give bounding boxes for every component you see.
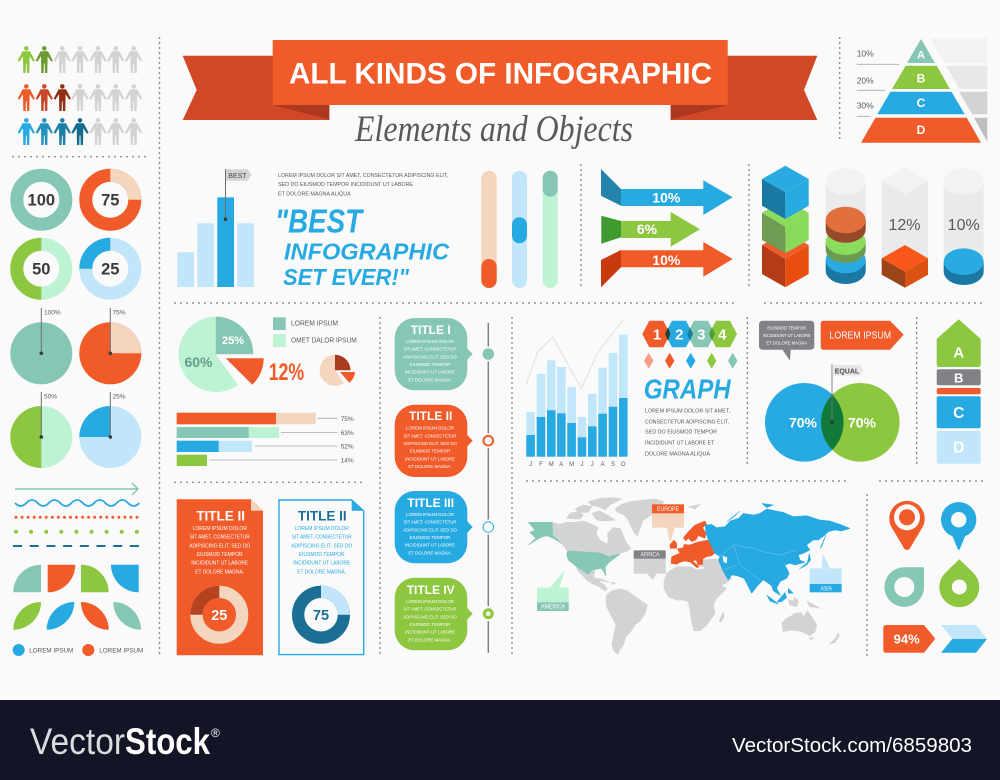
12 percent prism: 12% bbox=[888, 217, 921, 234]
timeline bubble IV bbox=[395, 578, 473, 650]
timeline bubble II: INCIDIDUNT UT LABORE bbox=[405, 456, 455, 461]
lorem paragraph: LOREM IPSUM DOLOR SIT AMET, CONSECTETUR ADIPISCING ELIT, bbox=[278, 173, 448, 179]
exploded pie chart: 60% bbox=[184, 354, 213, 370]
lorem paragraph bbox=[278, 173, 448, 198]
outlined document card: LOREM IPSUM DOLOR bbox=[295, 526, 349, 532]
timeline bubble I: SIT AMET, CONSECTETUR bbox=[404, 347, 457, 352]
bottom left legend bbox=[13, 644, 143, 656]
graph heading: GRAPH bbox=[644, 374, 731, 405]
94 percent tag: 94% bbox=[894, 632, 920, 646]
exploded pie chart bbox=[178, 317, 304, 392]
timeline bubble III: INCIDIDUNT UT LABORE bbox=[405, 543, 455, 548]
quarter circle and leaf shapes bbox=[13, 565, 141, 630]
outlined document card: INCIDIDUNT UT LABORE bbox=[293, 561, 351, 567]
africa callout: AFRICA bbox=[640, 553, 659, 559]
outlined document card: ADIPISCING ELIT, SED DO bbox=[291, 543, 352, 549]
diamonds bbox=[644, 353, 737, 369]
graph paragraph: CONSECTETUR ADIPISCING ELIT, bbox=[645, 419, 729, 425]
teal drop icon bbox=[884, 567, 924, 607]
timeline bubble I: LOREM IPSUM DOLOR bbox=[406, 339, 455, 344]
venn diagram: 70% bbox=[848, 415, 877, 431]
outlined document card: TITLE II bbox=[298, 509, 347, 524]
timeline bubble II bbox=[395, 405, 473, 477]
speech bubble bbox=[759, 321, 814, 361]
column chart with line: J bbox=[529, 462, 532, 468]
pie charts with labels: 75% bbox=[112, 310, 126, 316]
pie charts with labels: 100% bbox=[44, 310, 61, 316]
africa callout bbox=[634, 550, 666, 580]
venn diagram: 70% bbox=[789, 415, 818, 431]
column chart with line: A bbox=[601, 462, 605, 468]
timeline bbox=[395, 318, 496, 653]
timeline bubble II: ET DOLORE MAGNA. bbox=[408, 464, 452, 469]
orange document card: SIT AMET, CONSECTETUR bbox=[190, 535, 250, 541]
folded arrows: 10% bbox=[652, 190, 681, 206]
orange document card: ADIPISCING ELIT, SED DO bbox=[189, 543, 250, 549]
exploded pie chart: 25% bbox=[222, 335, 244, 347]
timeline bubble II: ADIPISCING ELIT, SED DO bbox=[403, 441, 457, 446]
timeline bubble II: LOREM IPSUM DOLOR bbox=[406, 426, 455, 431]
donut charts: 100 bbox=[28, 192, 55, 210]
graph paragraph: INCIDIDUNT UT LABORE ET bbox=[645, 440, 715, 446]
orange document card: TITLE II bbox=[196, 509, 245, 524]
speech bubble: ET DOLORE MAGNA bbox=[766, 340, 807, 346]
numbered hexagons: 4 bbox=[718, 326, 727, 344]
title text: ALL KINDS OF INFOGRAPHIC bbox=[289, 57, 712, 90]
lorem ipsum tag: LOREM IPSUM bbox=[829, 330, 891, 342]
subtitle: Elements and Objects bbox=[354, 109, 633, 150]
timeline bubble IV: ADIPISCING ELIT, SED DO bbox=[403, 614, 457, 619]
horizontal progress bars: 75% bbox=[341, 416, 354, 423]
speech bubble: INCIDIDUNT UT LABORE bbox=[763, 333, 811, 338]
america callout: AMERICA bbox=[541, 605, 565, 611]
timeline bubble I: TITLE I bbox=[411, 323, 451, 337]
timeline bubble I: INCIDIDUNT UT LABORE bbox=[405, 370, 455, 375]
pie charts with labels bbox=[10, 308, 141, 468]
10 percent cylinder: 10% bbox=[948, 217, 980, 234]
title ribbon bbox=[183, 40, 817, 120]
timeline bubble III bbox=[395, 491, 473, 563]
quote bbox=[275, 203, 449, 290]
donut charts: 75 bbox=[101, 192, 119, 210]
horizontal progress bars bbox=[177, 413, 354, 466]
stacked cubes bbox=[762, 166, 809, 287]
numbered hexagons bbox=[642, 321, 737, 347]
timeline bubble III: TITLE III bbox=[407, 496, 454, 510]
exploded pie chart: 12% bbox=[269, 359, 304, 386]
timeline bubble III: LOREM IPSUM DOLOR bbox=[406, 512, 455, 517]
gray land masses bbox=[552, 498, 839, 654]
outlined document card bbox=[279, 499, 364, 655]
venn diagram bbox=[765, 364, 900, 462]
orange document card: ET DOLORE MAGNA. bbox=[195, 569, 244, 575]
orange document card bbox=[177, 499, 263, 655]
graph paragraph bbox=[645, 408, 730, 457]
footer band: ® bbox=[211, 726, 220, 740]
timeline nodes bbox=[481, 346, 496, 621]
pyramid: 20% bbox=[857, 76, 874, 86]
outlined document card: 75 bbox=[313, 608, 329, 624]
timeline bubble III: SIT AMET, CONSECTETUR bbox=[404, 520, 457, 525]
folded arrows: 6% bbox=[637, 221, 658, 237]
outlined document card: SIT AMET, CONSECTETUR bbox=[292, 535, 352, 541]
pyramid: 30% bbox=[857, 101, 874, 111]
stacked letter tags: D bbox=[953, 440, 964, 456]
numbered hexagons: 1 bbox=[653, 326, 661, 344]
line styles bbox=[13, 483, 139, 546]
small exploded pie bbox=[320, 355, 355, 386]
timeline bubble III: ET DOLORE MAGNA. bbox=[408, 550, 452, 555]
orange document card: 25 bbox=[211, 608, 227, 624]
pie charts with labels: 25% bbox=[112, 394, 126, 400]
column chart with line: O bbox=[621, 462, 626, 468]
10 percent cylinder bbox=[944, 168, 984, 285]
blue map pin bbox=[941, 502, 976, 550]
venn diagram: EQUAL bbox=[835, 368, 860, 375]
asia callout bbox=[810, 553, 842, 592]
footer band bbox=[0, 700, 1000, 780]
pie charts with labels: 50% bbox=[44, 394, 57, 400]
europe callout: EUROPE bbox=[657, 507, 679, 513]
donut charts: 25 bbox=[101, 261, 119, 279]
quote: "BEST bbox=[275, 203, 364, 240]
numbered hexagons: 3 bbox=[697, 326, 705, 344]
europe callout bbox=[652, 504, 684, 542]
pyramid: B bbox=[917, 72, 926, 86]
lorem paragraph: SED DO EIUSMOD TEMPOR INCIDIDUNT UT LABORE bbox=[278, 182, 413, 188]
donut charts bbox=[17, 175, 135, 293]
timeline bubble II: EIUSMOD TEMPOR bbox=[410, 449, 451, 454]
timeline bubble I bbox=[395, 318, 473, 390]
column chart with line: J bbox=[580, 462, 584, 468]
footer band: Stock bbox=[125, 721, 210, 762]
column chart with line: M bbox=[549, 462, 554, 468]
timeline bubble IV: INCIDIDUNT UT LABORE bbox=[405, 630, 455, 635]
stacked cylinder bbox=[826, 168, 866, 284]
timeline bubble IV: ET DOLORE MAGNA. bbox=[408, 637, 452, 642]
pyramid: 10% bbox=[857, 49, 874, 59]
graph paragraph: LOREM IPSUM DOLOR SIT AMET, bbox=[645, 408, 730, 414]
pyramid bbox=[857, 38, 987, 143]
timeline bubble III: ADIPISCING ELIT, SED DO bbox=[403, 527, 457, 532]
numbered hexagons: 2 bbox=[675, 326, 683, 344]
world map bbox=[528, 498, 850, 654]
america highlighted bbox=[528, 522, 620, 576]
folded arrows: 10% bbox=[652, 252, 681, 268]
pie legend bbox=[273, 317, 357, 347]
timeline bubble I: EIUSMOD TEMPOR bbox=[410, 362, 451, 367]
timeline bubble IV: TITLE IV bbox=[407, 583, 455, 597]
pie legend: LOREM IPSUM bbox=[291, 321, 338, 328]
europe highlighted bbox=[670, 521, 716, 568]
pie legend: OMET DALOR IPSUM bbox=[291, 338, 357, 344]
quote: SET EVER!" bbox=[283, 264, 410, 290]
folded arrows bbox=[601, 169, 733, 287]
orange document card: INCIDIDUNT UT LABORE bbox=[191, 561, 249, 567]
bottom left legend: LOREM IPSUM bbox=[29, 648, 73, 654]
chevron bbox=[941, 625, 987, 653]
94 percent tag bbox=[883, 625, 935, 653]
donut charts: 50 bbox=[32, 261, 50, 279]
column chart with line: M bbox=[569, 462, 574, 468]
timeline bubble II: SIT AMET, CONSECTETUR bbox=[404, 433, 457, 438]
timeline bubble II: TITLE II bbox=[409, 409, 452, 423]
america callout bbox=[537, 570, 569, 611]
column chart with line: S bbox=[611, 462, 615, 468]
outlined document card: ET DOLORE MAGNA. bbox=[297, 569, 346, 575]
lorem paragraph: ET DOLORE MAGNA ALIQUA bbox=[278, 192, 351, 198]
column chart with line: F bbox=[539, 462, 543, 468]
timeline bubble IV: EIUSMOD TEMPOR bbox=[410, 622, 451, 627]
asia callout: ASIA bbox=[821, 586, 832, 592]
timeline bubble III: EIUSMOD TEMPOR bbox=[410, 535, 451, 540]
lorem ipsum tag bbox=[821, 321, 904, 350]
outlined document card: EIUSMOD TEMPOR bbox=[299, 552, 345, 558]
timeline bubble IV: SIT AMET, CONSECTETUR bbox=[404, 607, 457, 612]
column chart with line bbox=[526, 319, 628, 468]
stacked letter tags: C bbox=[953, 405, 964, 422]
graph paragraph: DOLORE MAGNA ALIQUA bbox=[645, 451, 710, 457]
asia highlighted bbox=[705, 503, 850, 604]
best bar chart: BEST bbox=[228, 173, 247, 180]
vertical sliders bbox=[481, 171, 558, 288]
column chart with line: J bbox=[591, 462, 594, 468]
horizontal progress bars: 63% bbox=[341, 430, 354, 437]
orange map pin bbox=[889, 501, 925, 550]
12 percent prism bbox=[882, 167, 928, 288]
orange document card: EIUSMOD TEMPOR bbox=[197, 552, 243, 558]
horizontal progress bars: 14% bbox=[341, 458, 354, 464]
timeline bubble I: ET DOLORE MAGNA. bbox=[408, 377, 452, 382]
footer band: Vector bbox=[30, 721, 125, 762]
orange document card: LOREM IPSUM DOLOR bbox=[193, 526, 247, 532]
people pictograms bbox=[18, 46, 142, 145]
green drop icon bbox=[939, 559, 979, 607]
column chart with line: A bbox=[559, 462, 563, 468]
bottom left legend: LOREM IPSUM bbox=[99, 648, 143, 654]
stacked letter tags: B bbox=[954, 370, 963, 386]
pyramid: A bbox=[917, 50, 925, 62]
footer band: VectorStock.com/6859803 bbox=[732, 735, 972, 757]
pyramid: C bbox=[917, 96, 926, 110]
stacked letter tags bbox=[937, 319, 981, 464]
pyramid: D bbox=[917, 123, 926, 137]
best bar chart bbox=[177, 169, 254, 287]
horizontal progress bars: 52% bbox=[341, 444, 354, 450]
speech bubble: EIUSMOD TEMPOR bbox=[767, 326, 807, 330]
timeline bubble I: ADIPISCING ELIT, SED DO bbox=[403, 354, 457, 359]
timeline bubble IV: LOREM IPSUM DOLOR bbox=[406, 599, 455, 604]
graph paragraph: SED DO EIUSMOD TEMPOR bbox=[645, 430, 717, 436]
stacked letter tags: A bbox=[953, 344, 964, 361]
quote: INFOGRAPHIC bbox=[284, 238, 449, 264]
